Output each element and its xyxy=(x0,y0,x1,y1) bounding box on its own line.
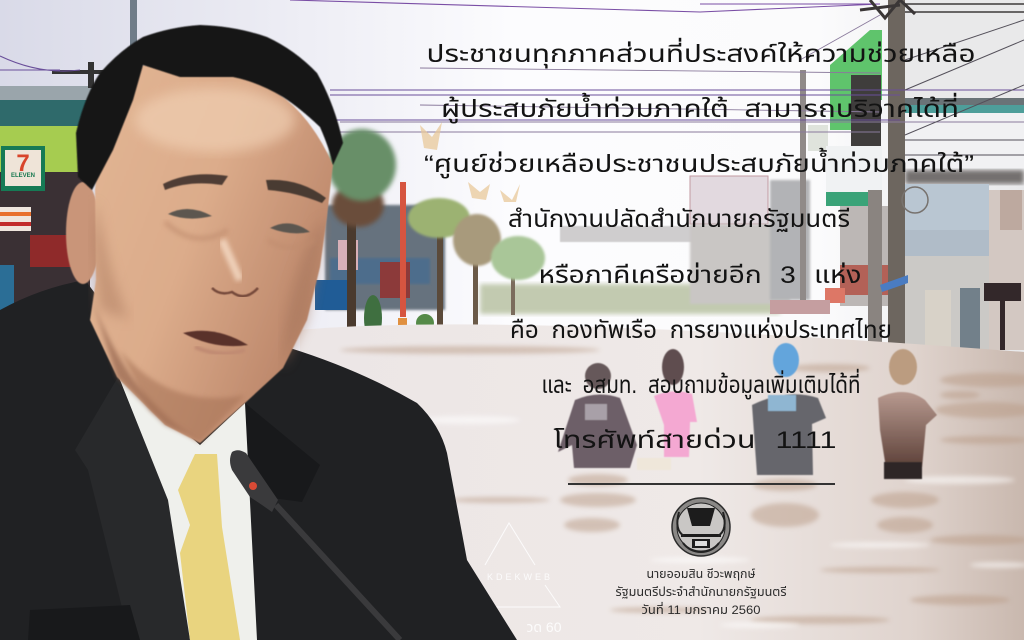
eye bags xyxy=(165,222,315,248)
line 3: “ศูนย์ช่วยเหลือประชาชนประสบภัยน้ำท่วมภาคใต้” xyxy=(424,147,974,179)
mouth xyxy=(183,331,248,346)
lapels xyxy=(75,377,190,640)
main text block xyxy=(424,37,976,454)
line 7: และ อสมท. สอบถามข้อมูลเพิ่มเติมได้ที่ xyxy=(542,368,860,400)
person 4 xyxy=(878,392,937,468)
shirt collar xyxy=(118,375,257,640)
suit jacket xyxy=(0,280,517,640)
watermark: triangle logo: วด 60 xyxy=(527,619,562,635)
palm trees xyxy=(328,122,545,341)
person 1 xyxy=(558,394,637,468)
forehead highlight xyxy=(135,88,295,152)
watermark: triangle logo xyxy=(485,523,562,635)
icon: 7-Eleven sign xyxy=(0,146,45,231)
line 5: หรือภาคีเครือข่ายอีก 3 แห่ง xyxy=(538,261,862,289)
line 6: คือ กองทัพเรือ การยางแห่งประเทศไทย xyxy=(510,316,892,344)
neck shadow xyxy=(92,300,200,440)
people wading through water xyxy=(558,343,937,479)
hair xyxy=(76,25,343,190)
nose xyxy=(222,240,240,280)
face xyxy=(90,65,333,443)
eyebrows xyxy=(163,174,228,190)
utility poles and wires xyxy=(0,0,1024,213)
distant shops and street xyxy=(315,176,810,334)
person 3 xyxy=(752,394,826,475)
position: รัฐมนตรีประจำสำนักนายกรัฐมนตรี xyxy=(616,585,787,599)
signature block xyxy=(616,567,787,617)
floodwater xyxy=(300,324,1024,640)
icon: government seal xyxy=(672,498,730,556)
name: นายออมสิน ชีวะพฤกษ์ xyxy=(646,567,756,581)
street buildings, right side xyxy=(770,0,1024,352)
left shop buildings xyxy=(0,86,100,312)
eyes xyxy=(168,209,212,219)
line 2: ผู้ประสบภัยน้ำท่วมภาคใต้ สามารถบริจาคได้ที่ xyxy=(441,92,959,124)
microphone xyxy=(230,450,400,640)
cheek shadow xyxy=(283,217,327,368)
line 1: ประชาชนทุกภาคส่วนที่ประสงค์ให้ความช่วยเหลือ xyxy=(426,37,976,69)
date: วันที่ 11 มกราคม 2560 xyxy=(642,601,761,617)
ear xyxy=(66,182,100,284)
icon: 7-Eleven sign: ELEVEN xyxy=(11,173,35,179)
necktie xyxy=(178,454,240,640)
watermark: triangle logo: KDEKWEB xyxy=(487,572,553,582)
icon: 7-Eleven sign: 7 xyxy=(16,150,30,177)
line 8: โทรศัพท์สายด่วน 1111 xyxy=(554,426,836,454)
portrait: man in dark suit xyxy=(0,25,517,640)
line 4: สำนักงานปลัดสำนักนายกรัฐมนตรี xyxy=(508,206,850,233)
person 2 xyxy=(654,391,697,457)
